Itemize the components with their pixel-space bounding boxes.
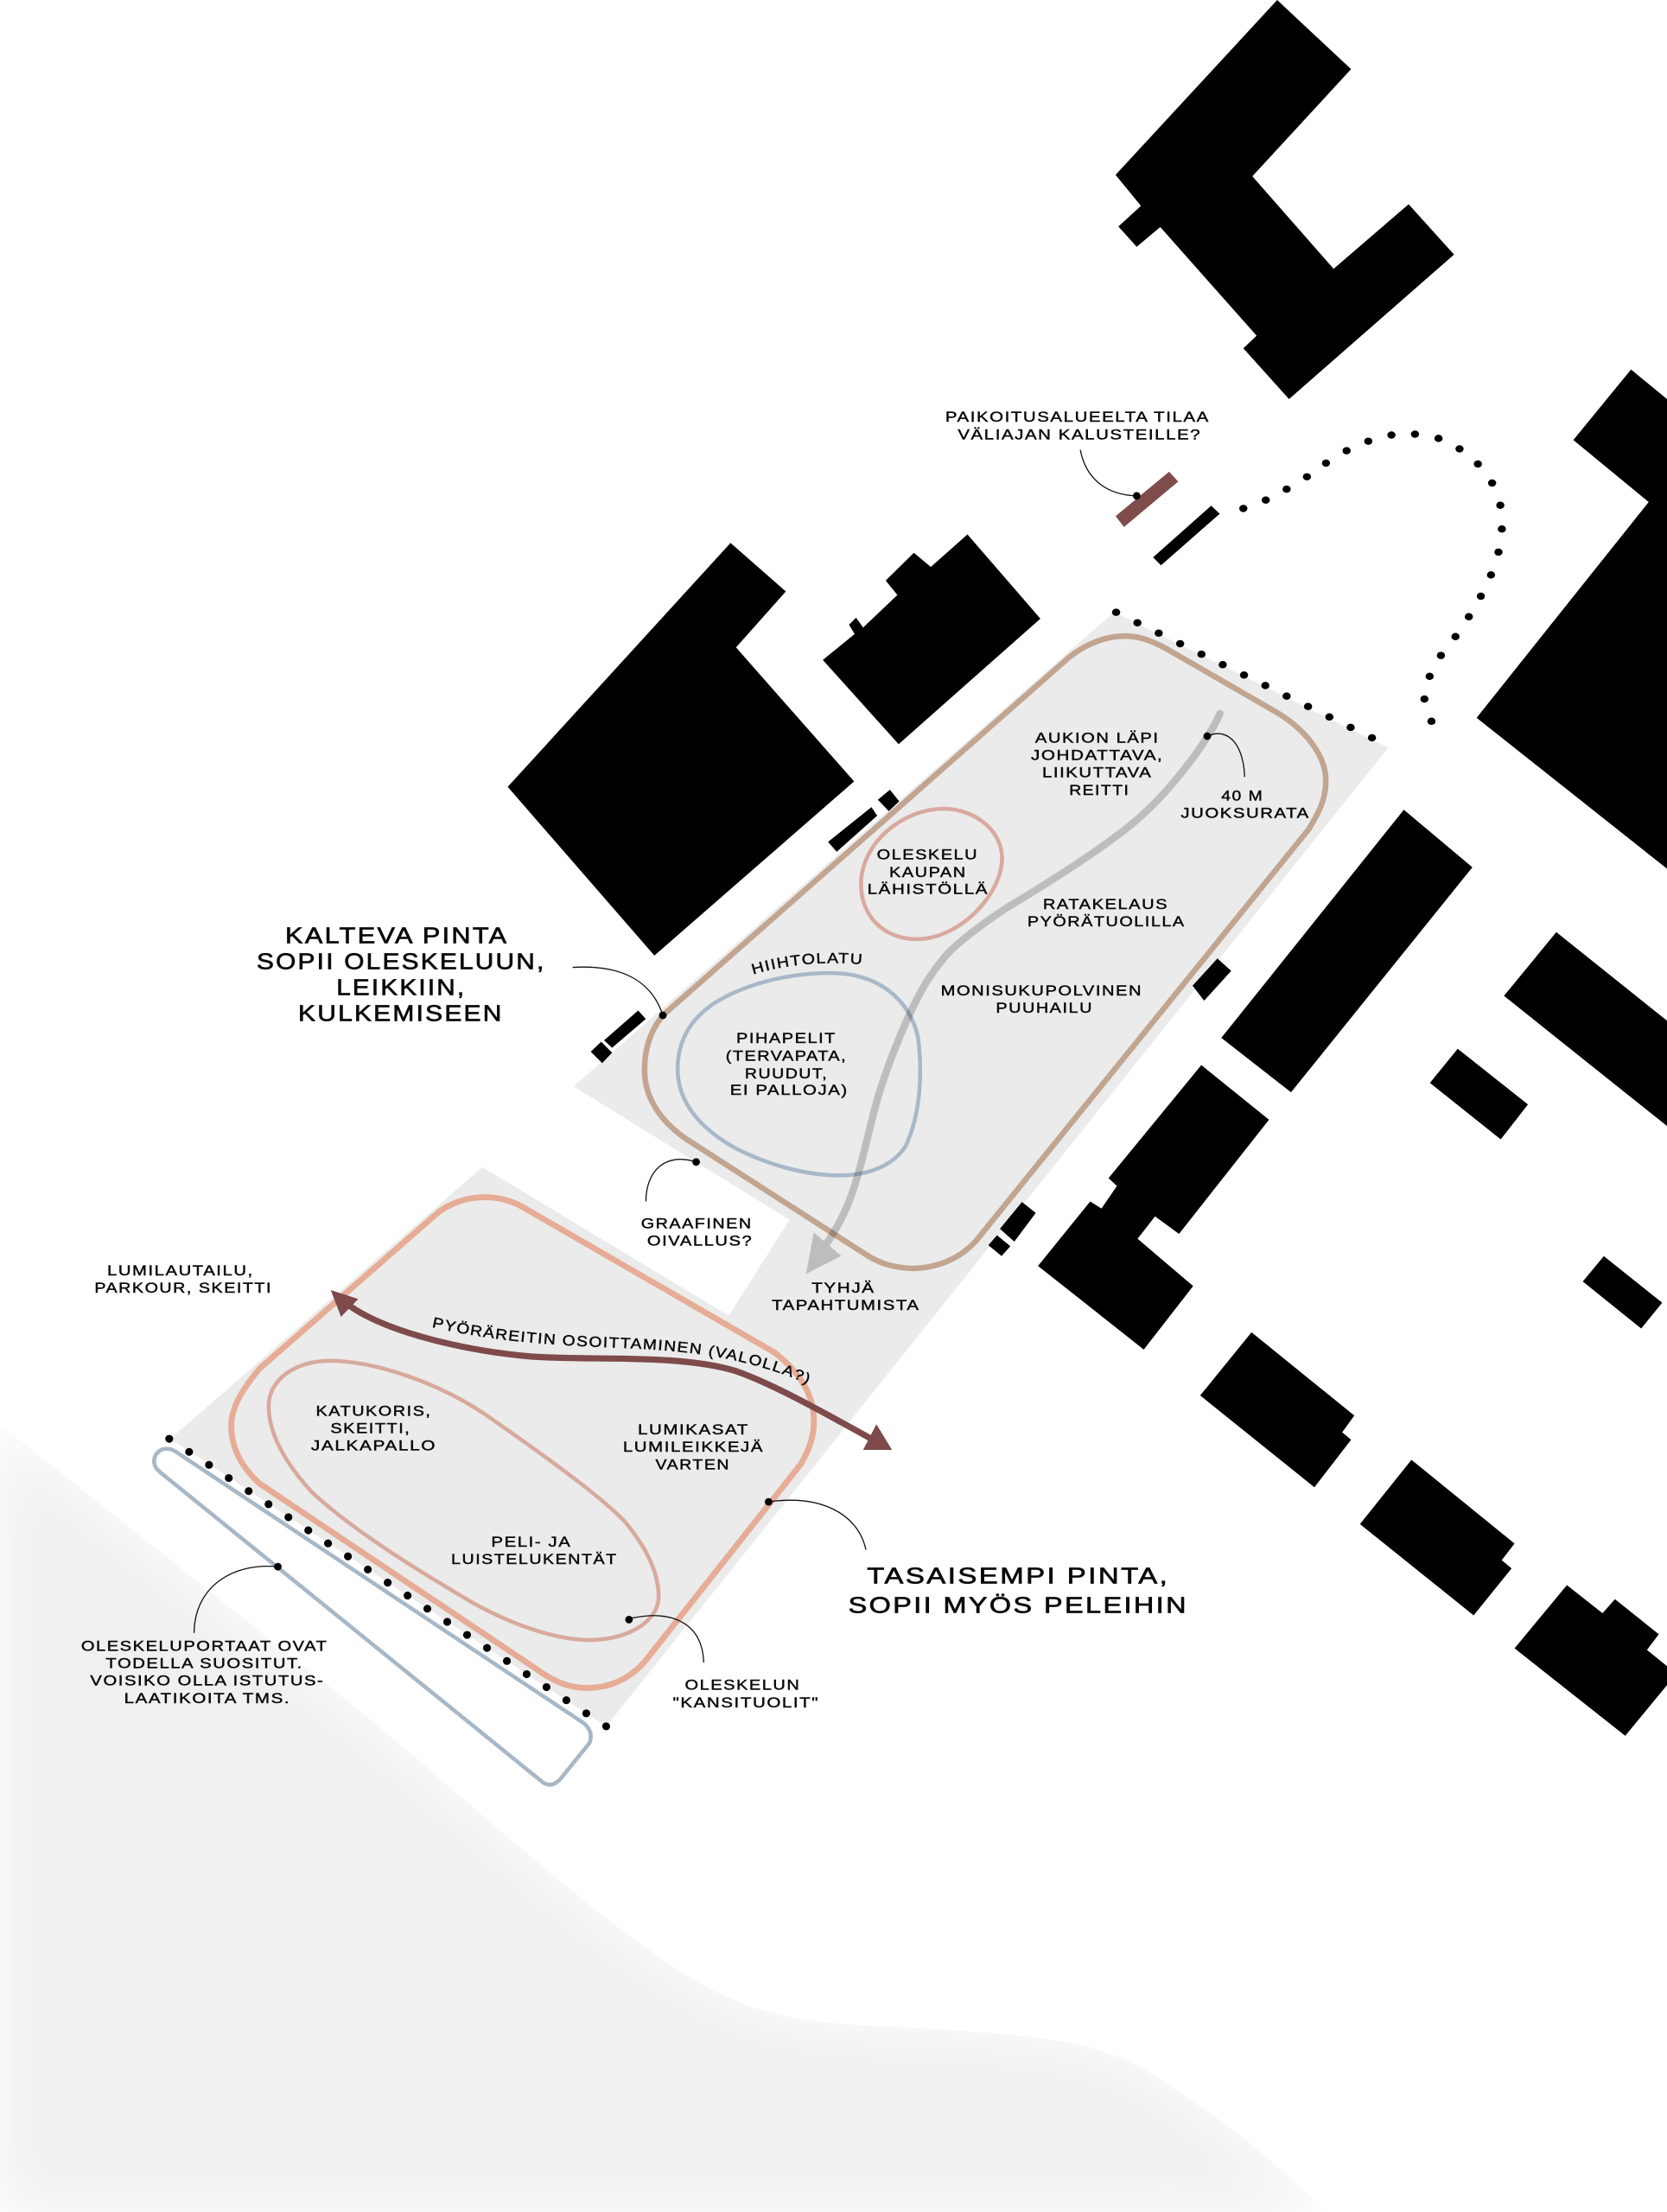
heading: kalteva pinta: SOPII OLESKELUUN,	[257, 949, 546, 975]
label: tyhjä tapahtumista: TYHJÄ	[811, 1280, 875, 1296]
label: monisukupolvinen puuhailu: PUUHAILU	[996, 1000, 1093, 1016]
label: pihapelit: RUUDUT,	[745, 1065, 828, 1082]
label: oleskelu kaupan lähistöllä: LÄHISTÖLLÄ	[868, 881, 989, 898]
heading: kalteva pinta: LEIKKIIN,	[336, 975, 466, 1001]
label: oleskeluportaat: LAATIKOITA TMS.	[124, 1690, 290, 1707]
label: graafinen oivallus: OIVALLUS?	[647, 1233, 753, 1249]
label: pihapelit: (TERVAPATA,	[726, 1047, 847, 1064]
blue rounded box: seating steps	[154, 1449, 591, 1784]
label: 40 m juoksurata: 40 M	[1221, 788, 1263, 804]
heading: kalteva pinta: KALTEVA PINTA	[285, 923, 508, 949]
label: peli- ja luistelukentät	[451, 1534, 618, 1567]
heading: kalteva pinta: KULKEMISEEN	[298, 1001, 504, 1027]
leader line: oleskeluportaat	[194, 1563, 282, 1633]
dotted tree line: southwest edge	[165, 1435, 610, 1730]
building: stepped southeast	[1038, 1065, 1269, 1350]
label: katukoris: JALKAPALLO	[311, 1438, 436, 1454]
label: aukion läpi	[1031, 730, 1163, 798]
bar: south edge	[1000, 1202, 1036, 1242]
label: 40 m juoksurata	[1180, 788, 1310, 822]
label: katukoris: SKEITTI,	[330, 1420, 410, 1436]
block: east edge	[1193, 958, 1231, 1001]
building: far east	[1504, 932, 1667, 1126]
inner oval: game courts	[269, 1361, 659, 1640]
leader line: 40 m	[1204, 733, 1244, 777]
heading: tasaisempi pinta: SOPII MYÖS PELEIHIN	[849, 1592, 1188, 1618]
building: south row 2	[1360, 1459, 1515, 1615]
label: katukoris: KATUKORIS,	[316, 1402, 431, 1419]
label: oleskeluportaat: OLESKELUPORTAAT OVAT	[81, 1638, 328, 1655]
label: aukion läpi: REITTI	[1069, 782, 1129, 798]
heading: tasaisempi pinta	[849, 1562, 1188, 1618]
label: paikoitusalue: VÄLIAJAN KALUSTEILLE?	[958, 427, 1201, 443]
building: L-shaped north	[1116, 0, 1454, 399]
leader line: graafinen oivallus	[646, 1158, 700, 1201]
heading: tasaisempi pinta: TASAISEMPI PINTA,	[867, 1562, 1169, 1588]
label: lumilautailu	[94, 1262, 272, 1296]
leader line: kansituolit	[625, 1616, 703, 1662]
building: south row 1	[1200, 1332, 1354, 1487]
background shade: lower terrain	[0, 1424, 1327, 2212]
building: east upper	[1477, 370, 1667, 868]
building: large west	[508, 543, 854, 956]
label: lumikasat	[623, 1421, 764, 1473]
heading: kalteva pinta	[257, 923, 546, 1027]
label: oleskelun kansituolit: OLESKELUN	[684, 1676, 800, 1693]
label: aukion läpi: LIIKUTTAVA	[1042, 764, 1152, 780]
label: lumilautailu: PARKOUR, SKEITTI	[94, 1280, 272, 1296]
label: oleskelu kaupan lähistöllä: OLESKELU	[877, 846, 978, 862]
label: 40 m juoksurata: JUOKSURATA	[1180, 805, 1310, 822]
label: oleskeluportaat: TODELLA SUOSITUT.	[105, 1656, 303, 1672]
temporary furniture bar	[1116, 472, 1178, 527]
dotted tree line: north edge of square	[1112, 608, 1376, 741]
label: lumikasat: VARTEN	[656, 1457, 730, 1473]
building: store	[823, 535, 1040, 744]
label: oleskeluportaat	[81, 1638, 328, 1707]
lower track	[232, 1198, 814, 1688]
bar: store front	[828, 807, 877, 852]
label: pyöräreitin osoittaminen: PYÖRÄREITIN OSOITTAMINEN (VALOLLA?)	[432, 1317, 809, 1386]
building: small far east	[1583, 1256, 1662, 1329]
label: katukoris	[311, 1402, 436, 1454]
building: long east	[1221, 810, 1473, 1092]
bar: north of square	[1153, 505, 1219, 565]
label: peli- ja luistelukentät: PELI- JA	[491, 1534, 571, 1550]
label: pihapelit: PIHAPELIT	[736, 1030, 837, 1046]
label: pihapelit: EI PALLOJA)	[730, 1082, 849, 1098]
block: west edge	[591, 1042, 612, 1063]
label: lumikasat: LUMILEIKKEJÄ	[623, 1439, 764, 1455]
label: ratakelaus	[1028, 896, 1186, 930]
label: oleskelu kaupan lähistöllä	[868, 846, 989, 898]
leader line: kalteva pinta	[573, 967, 666, 1019]
label: tyhjä tapahtumista: TAPAHTUMISTA	[772, 1297, 920, 1313]
grey route arrow	[806, 714, 1220, 1274]
bicycle route double arrow	[331, 1290, 892, 1450]
label: pihapelit	[726, 1030, 849, 1098]
label: aukion läpi: AUKION LÄPI	[1035, 730, 1159, 747]
oval: seating near store	[861, 809, 1002, 939]
square ground area	[170, 612, 1388, 1726]
upper running track	[645, 636, 1326, 1268]
label: paikoitusalue	[945, 409, 1210, 443]
label: peli- ja luistelukentät: LUISTELUKENTÄT	[451, 1551, 618, 1567]
leader line: tasaisempi pinta	[765, 1498, 866, 1550]
label: oleskelun kansituolit	[672, 1676, 819, 1711]
label: ratakelaus: RATAKELAUS	[1043, 896, 1168, 912]
label: graafinen oivallus	[641, 1215, 753, 1249]
block: south edge	[989, 1236, 1010, 1256]
label: aukion läpi: JOHDATTAVA,	[1031, 747, 1163, 764]
site furniture bars	[591, 505, 1231, 1256]
label: oleskeluportaat: VOISIKO OLLA ISTUTUS-	[90, 1673, 324, 1689]
bar: west edge	[604, 1011, 646, 1048]
dotted tree line: curved	[1239, 430, 1506, 725]
label: tyhjä tapahtumista	[772, 1280, 920, 1313]
label: lumilautailu: LUMILAUTAILU,	[107, 1262, 254, 1279]
label: monisukupolvinen puuhailu: MONISUKUPOLVINEN	[941, 982, 1142, 999]
label: oleskelun kansituolit: "KANSITUOLIT"	[672, 1694, 819, 1711]
label: ratakelaus: PYÖRÄTUOLILLA	[1028, 913, 1186, 930]
label: paikoitusalue: PAIKOITUSALUEELTA TILAA	[945, 409, 1210, 425]
block: store front	[878, 790, 900, 811]
label: hiihtolatu: HIIHTOLATU	[752, 952, 862, 975]
building: small east	[1430, 1049, 1528, 1140]
label: lumikasat: LUMIKASAT	[638, 1421, 749, 1438]
building: south row 3	[1515, 1586, 1667, 1736]
buildings	[508, 0, 1667, 1736]
label: monisukupolvinen puuhailu	[941, 982, 1142, 1016]
label: oleskelu kaupan lähistöllä: KAUPAN	[889, 864, 967, 880]
label: graafinen oivallus: GRAAFINEN	[641, 1215, 753, 1231]
leader line: paikoitusalue	[1080, 450, 1141, 499]
blue loop: ski track	[678, 973, 920, 1175]
